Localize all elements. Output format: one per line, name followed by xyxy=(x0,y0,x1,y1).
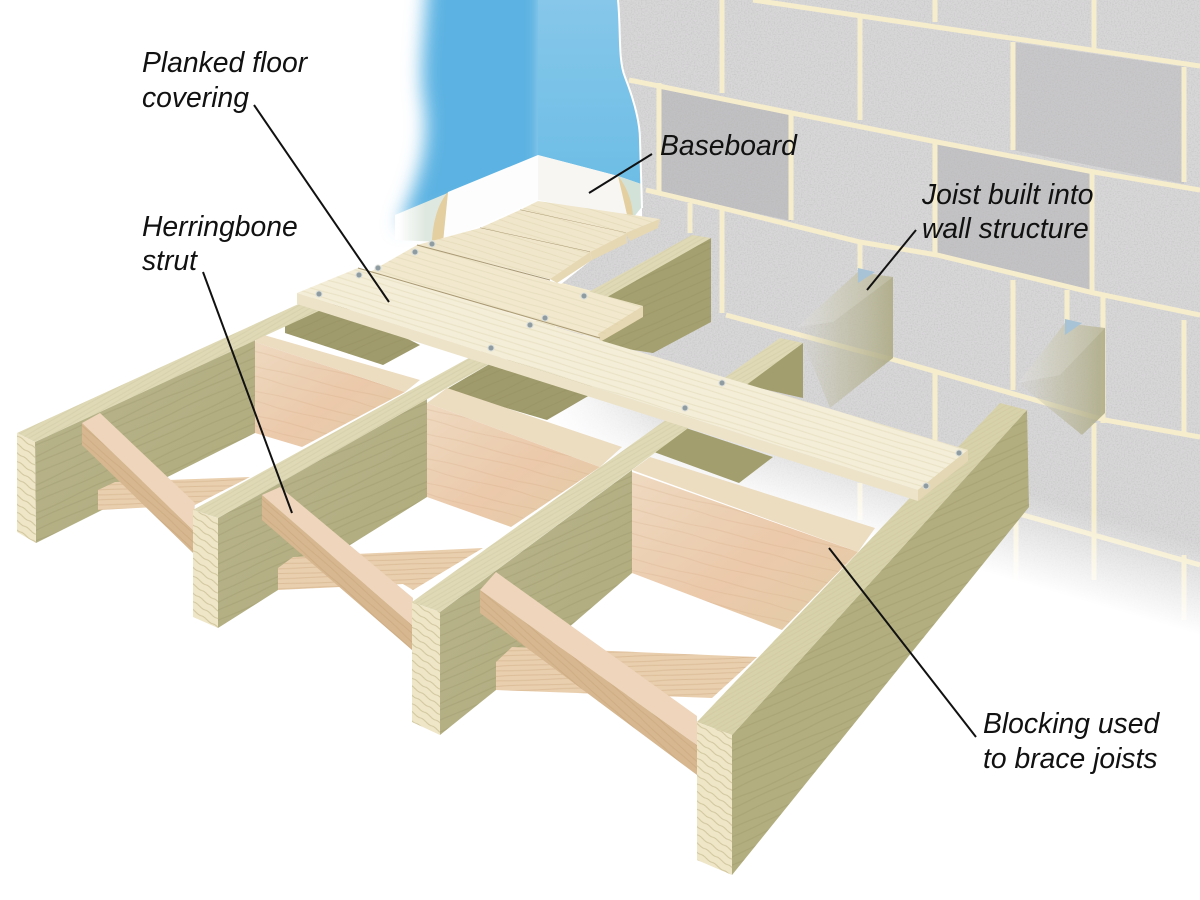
label: herringbone strut: strut xyxy=(142,244,198,276)
label: joist built into wall structure: Joist built into xyxy=(921,178,1093,210)
wall left fade xyxy=(545,335,660,470)
floor plank 1 xyxy=(520,201,660,241)
joist 2 xyxy=(193,235,711,628)
label: planked floor covering xyxy=(142,46,389,302)
label: blocking used to brace joists: Blocking used xyxy=(983,707,1160,739)
label: planked floor covering: Planked floor xyxy=(142,46,309,78)
blocking 2 xyxy=(427,388,622,527)
strut 2 rear xyxy=(278,548,483,590)
blocking 1 xyxy=(255,333,420,447)
blocking 3 xyxy=(632,457,875,630)
strut 1 front xyxy=(82,413,195,553)
label: blocking used to brace joists: to brace joists xyxy=(983,742,1158,774)
joist 4 xyxy=(697,403,1029,875)
joist pocket: ghost joist 1 xyxy=(797,268,893,408)
label: baseboard: Baseboard xyxy=(660,129,798,161)
joist 3 xyxy=(412,338,803,735)
floor nails xyxy=(316,241,962,489)
panel: blue painted wall xyxy=(392,0,642,262)
joist pocket: ghost joist 2 xyxy=(1018,319,1105,435)
wall fade to white xyxy=(520,250,1200,700)
floor plank 5 long xyxy=(297,268,968,501)
joist 1 far side xyxy=(285,300,420,365)
strut 2 front xyxy=(262,487,413,650)
label: joist built into wall structure: wall structure xyxy=(922,212,1089,244)
panel: concrete block wall xyxy=(556,0,1200,618)
label: baseboard xyxy=(589,129,798,193)
joist 2 far section xyxy=(600,238,711,353)
floor plank 3 xyxy=(417,228,592,283)
joist 3 middle side xyxy=(654,428,773,483)
baseboard xyxy=(432,155,633,242)
label: herringbone strut: Herringbone xyxy=(142,210,298,242)
label: blocking used to brace joists xyxy=(829,548,1160,774)
strut 3 rear xyxy=(496,647,757,698)
strut 3 front xyxy=(480,572,697,775)
label: herringbone strut xyxy=(142,210,298,513)
joist 1 xyxy=(17,285,360,543)
label: planked floor covering: covering xyxy=(142,81,249,113)
joist 2 middle side xyxy=(445,345,600,420)
label: joist built into wall structure xyxy=(867,178,1093,290)
strut 1 rear xyxy=(98,477,250,510)
joist 3 far side xyxy=(745,343,803,398)
floor plank 4 xyxy=(370,245,643,342)
floor plank 2 xyxy=(480,210,627,260)
